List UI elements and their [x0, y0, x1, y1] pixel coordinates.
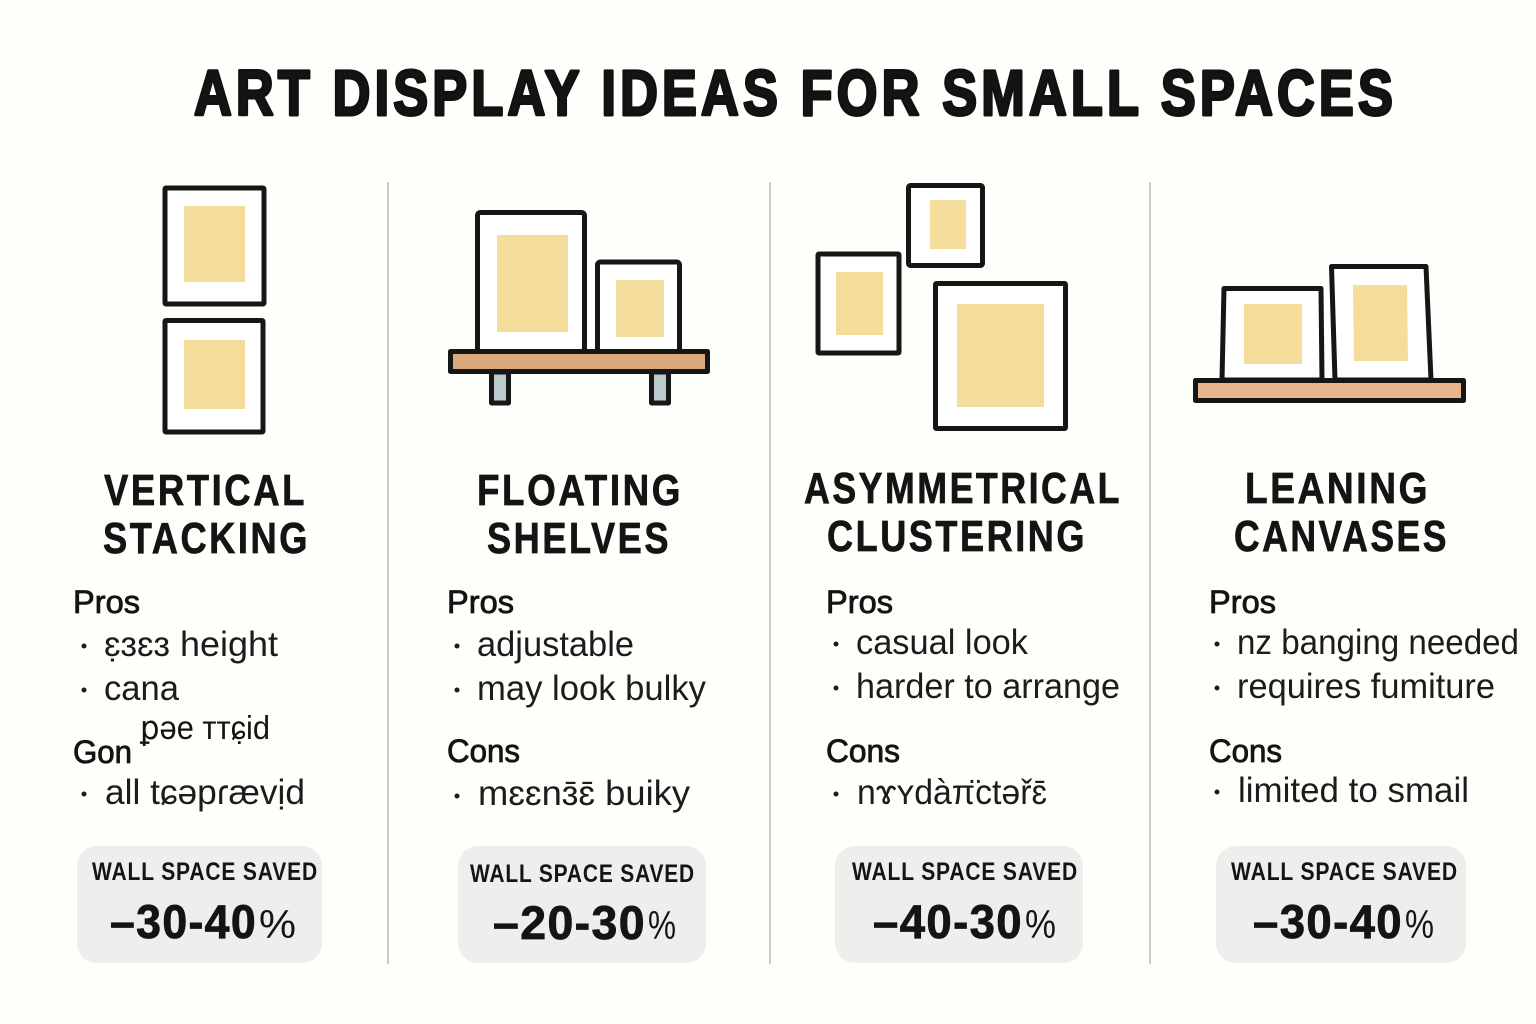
- text block: pros and cons: Cons: [1209, 733, 1282, 769]
- text block: pros and cons: Pros: [447, 584, 514, 620]
- text block: pros and cons: mɛɛnɜ̄ɛ̄ buiky: [478, 774, 691, 813]
- callout: wall space saved: WALL SPACE SAVED: [852, 858, 1078, 886]
- heading: leaning canvases: LEANING: [1245, 464, 1430, 513]
- panel: vertical stacking: [73, 188, 322, 963]
- callout: wall space saved: [835, 846, 1083, 963]
- callout: wall space saved: WALL SPACE SAVED: [92, 858, 318, 886]
- icon: frame cluster: [818, 186, 1066, 428]
- callout: wall space saved: –30-40: [1253, 895, 1403, 948]
- heading: floating shelves: SHELVES: [487, 514, 671, 563]
- callout: wall space saved: –40-30: [873, 895, 1023, 948]
- icon: stacked frames: [165, 188, 264, 432]
- text block: pros and cons: nz banging needed: [1237, 623, 1519, 662]
- heading: asymmetrical clustering: ASYMMETRICAL: [804, 464, 1122, 513]
- panel: asymmetrical clustering: [804, 186, 1122, 963]
- heading: vertical stacking: [103, 466, 310, 563]
- panel: leaning canvases: [1196, 266, 1519, 963]
- text block: pros and cons: casual look: [856, 623, 1028, 662]
- callout: wall space saved: %: [1025, 903, 1056, 947]
- text block: pros and cons: limited to smail: [1238, 771, 1469, 810]
- text block: pros and cons: adjustable: [477, 625, 634, 664]
- text block: pros and cons: Pros: [73, 584, 140, 620]
- callout: wall space saved: WALL SPACE SAVED: [470, 860, 695, 888]
- callout: wall space saved: %: [259, 903, 296, 947]
- text block: pros and cons: [447, 584, 706, 813]
- text block: pros and cons: cana: [104, 669, 180, 708]
- text block: pros and cons: [826, 584, 1120, 812]
- heading: floating shelves: FLOATING: [477, 466, 683, 515]
- icon: leaning frames on ledge: [1196, 266, 1464, 400]
- heading: floating shelves: [477, 466, 683, 563]
- heading: leaning canvases: [1234, 464, 1449, 561]
- text block: pros and cons: Pros: [1209, 584, 1276, 620]
- panel: floating shelves: [447, 212, 708, 963]
- text block: pros and cons: Cons: [447, 733, 520, 769]
- callout: wall space saved: –30-40: [110, 895, 257, 948]
- heading: vertical stacking: VERTICAL: [104, 466, 307, 515]
- callout: wall space saved: –20-30: [493, 896, 646, 949]
- text block: pros and cons: ꝑəe ттɕ̣id: [139, 709, 270, 746]
- text block: pros and cons: [73, 584, 305, 812]
- text block: pros and cons: Gon: [73, 734, 132, 770]
- icon: floating shelf with frames: [450, 212, 708, 403]
- heading: leaning canvases: CANVASES: [1234, 512, 1449, 561]
- callout: wall space saved: [1216, 846, 1466, 963]
- text block: pros and cons: all tɕəpɾævịd: [105, 773, 305, 812]
- heading: asymmetrical clustering: [804, 464, 1122, 561]
- callout: wall space saved: %: [1405, 903, 1434, 947]
- text block: pros and cons: Pros: [826, 584, 893, 620]
- callout: wall space saved: [458, 846, 706, 963]
- text block: pros and cons: Cons: [826, 733, 900, 769]
- callout: wall space saved: [77, 846, 322, 963]
- text block: pros and cons: requires fumiture: [1237, 667, 1495, 706]
- callout: wall space saved: %: [648, 904, 676, 948]
- text block: pros and cons: ɛ̣ɜɛɜ height: [104, 625, 278, 664]
- text block: pros and cons: harder to arrange: [856, 667, 1120, 706]
- heading: vertical stacking: STACKING: [103, 514, 310, 563]
- text block: pros and cons: may look bulky: [477, 669, 706, 708]
- text block: pros and cons: [1209, 584, 1519, 810]
- heading: asymmetrical clustering: CLUSTERING: [827, 512, 1087, 561]
- callout: wall space saved: WALL SPACE SAVED: [1231, 858, 1458, 886]
- text block: pros and cons: nɤʏdàπ̈ctəřɛ̄: [857, 773, 1047, 812]
